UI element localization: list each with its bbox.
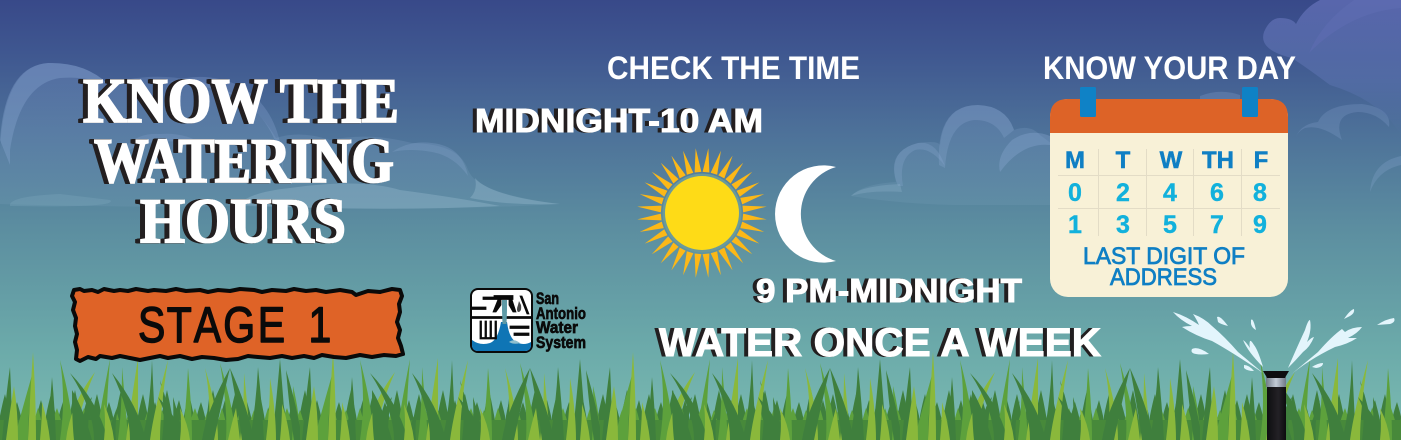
water spray xyxy=(1173,309,1394,377)
address digits: 4 xyxy=(1163,179,1177,207)
frequency text: WATER ONCE A WEEK xyxy=(659,321,1101,365)
title: KNOW THE xyxy=(83,66,399,136)
weekday labels xyxy=(1065,147,1268,174)
address digits: 8 xyxy=(1253,179,1267,207)
stage banner xyxy=(72,289,403,361)
weekday labels: M xyxy=(1065,147,1085,174)
weekday labels: F xyxy=(1254,147,1268,174)
logo wordmark: Water xyxy=(536,318,578,337)
grass xyxy=(0,350,1401,440)
cloud: left xyxy=(0,63,560,209)
calendar xyxy=(1050,87,1288,297)
weekday labels: W xyxy=(1160,147,1183,174)
evening hours: 9 PM-MIDNIGHT xyxy=(756,272,1022,309)
morning hours: MIDNIGHT-10 AM xyxy=(475,102,763,139)
logo: San Antonio Water System xyxy=(470,288,586,353)
title: HOURS xyxy=(140,186,346,256)
cloud: top right corner xyxy=(1263,0,1401,135)
clouds xyxy=(0,0,1401,209)
weekday labels: T xyxy=(1116,147,1131,174)
calendar note: LAST DIGIT OF xyxy=(1083,243,1245,270)
address digits: 1 xyxy=(1068,211,1082,239)
icon: sprinkler xyxy=(1173,309,1394,440)
heading: know your day: KNOW YOUR DAY xyxy=(1043,50,1296,86)
cloud: centre right xyxy=(851,105,1060,205)
heading: check the time: CHECK THE TIME xyxy=(607,50,860,86)
address digits: 0 xyxy=(1068,179,1082,207)
cloud: right edge xyxy=(1200,92,1401,192)
logo wordmark: System xyxy=(536,333,586,352)
calendar note xyxy=(1083,243,1245,291)
title: WATERING xyxy=(94,126,394,196)
address digits: 7 xyxy=(1210,211,1224,239)
logo wordmark: Antonio xyxy=(536,304,586,323)
address digits: 2 xyxy=(1116,179,1130,207)
logo wordmark: San xyxy=(536,289,559,308)
stage label: STAGE 1 xyxy=(138,297,331,353)
weekday labels: TH xyxy=(1202,147,1234,174)
logo wordmark xyxy=(536,289,586,352)
address digits: 9 xyxy=(1253,211,1267,239)
address digits: 5 xyxy=(1163,211,1177,239)
calendar note: ADDRESS xyxy=(1110,264,1217,291)
address digits: 6 xyxy=(1210,179,1224,207)
address digits: 3 xyxy=(1116,211,1130,239)
icon: moon xyxy=(775,165,836,263)
address digits xyxy=(1068,179,1267,239)
icon: sun xyxy=(637,148,767,278)
title xyxy=(83,66,399,256)
